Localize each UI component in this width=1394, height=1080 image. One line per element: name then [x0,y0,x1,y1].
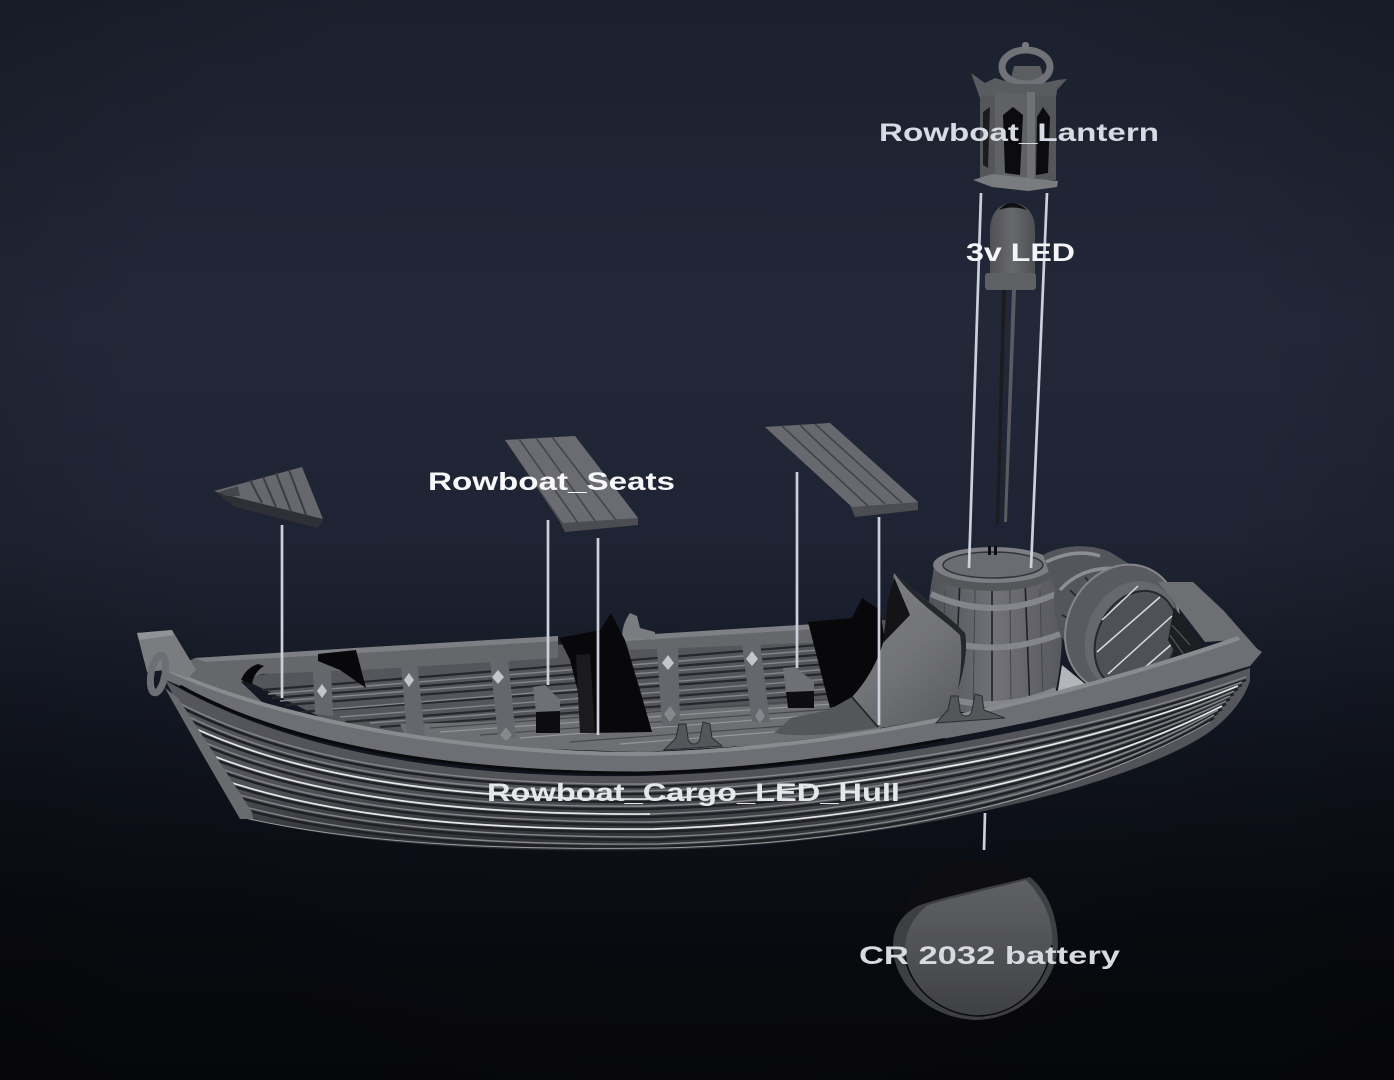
label: 3v LED: 3v LED [966,239,1075,267]
bow stem post [137,630,253,819]
seat support blocks [533,667,814,733]
hull planking [165,668,1250,850]
cargo sack [774,573,1095,735]
interior shadows [241,598,888,733]
far gunwale [170,613,880,724]
assembly guide lines [282,193,1047,850]
barrel: lying [1043,546,1199,710]
oar cleats [664,694,1005,750]
label: Rowboat_Lantern: Rowboat_Lantern [879,119,1159,147]
label: Rowboat_Seats: Rowboat_Seats [428,468,675,496]
icon: middle seat plank [505,436,638,532]
interior wall and floor [241,620,960,752]
icon: rear seat plank [765,423,918,517]
icon: bow ring [148,654,168,694]
wall ribs [313,642,770,741]
boat hull [137,546,1262,850]
icon: lantern [971,42,1067,191]
barrel: upright [928,546,1062,712]
label: CR 2032 battery: CR 2032 battery [859,942,1120,970]
stern block [1158,582,1260,664]
icon: CR2032 battery [893,860,1058,1020]
near gunwale [160,636,1262,773]
label: Rowboat_Cargo_LED_Hull: Rowboat_Cargo_LED_Hull [487,779,900,807]
icon: LED [985,203,1036,525]
icon: forward seat piece [214,467,323,528]
